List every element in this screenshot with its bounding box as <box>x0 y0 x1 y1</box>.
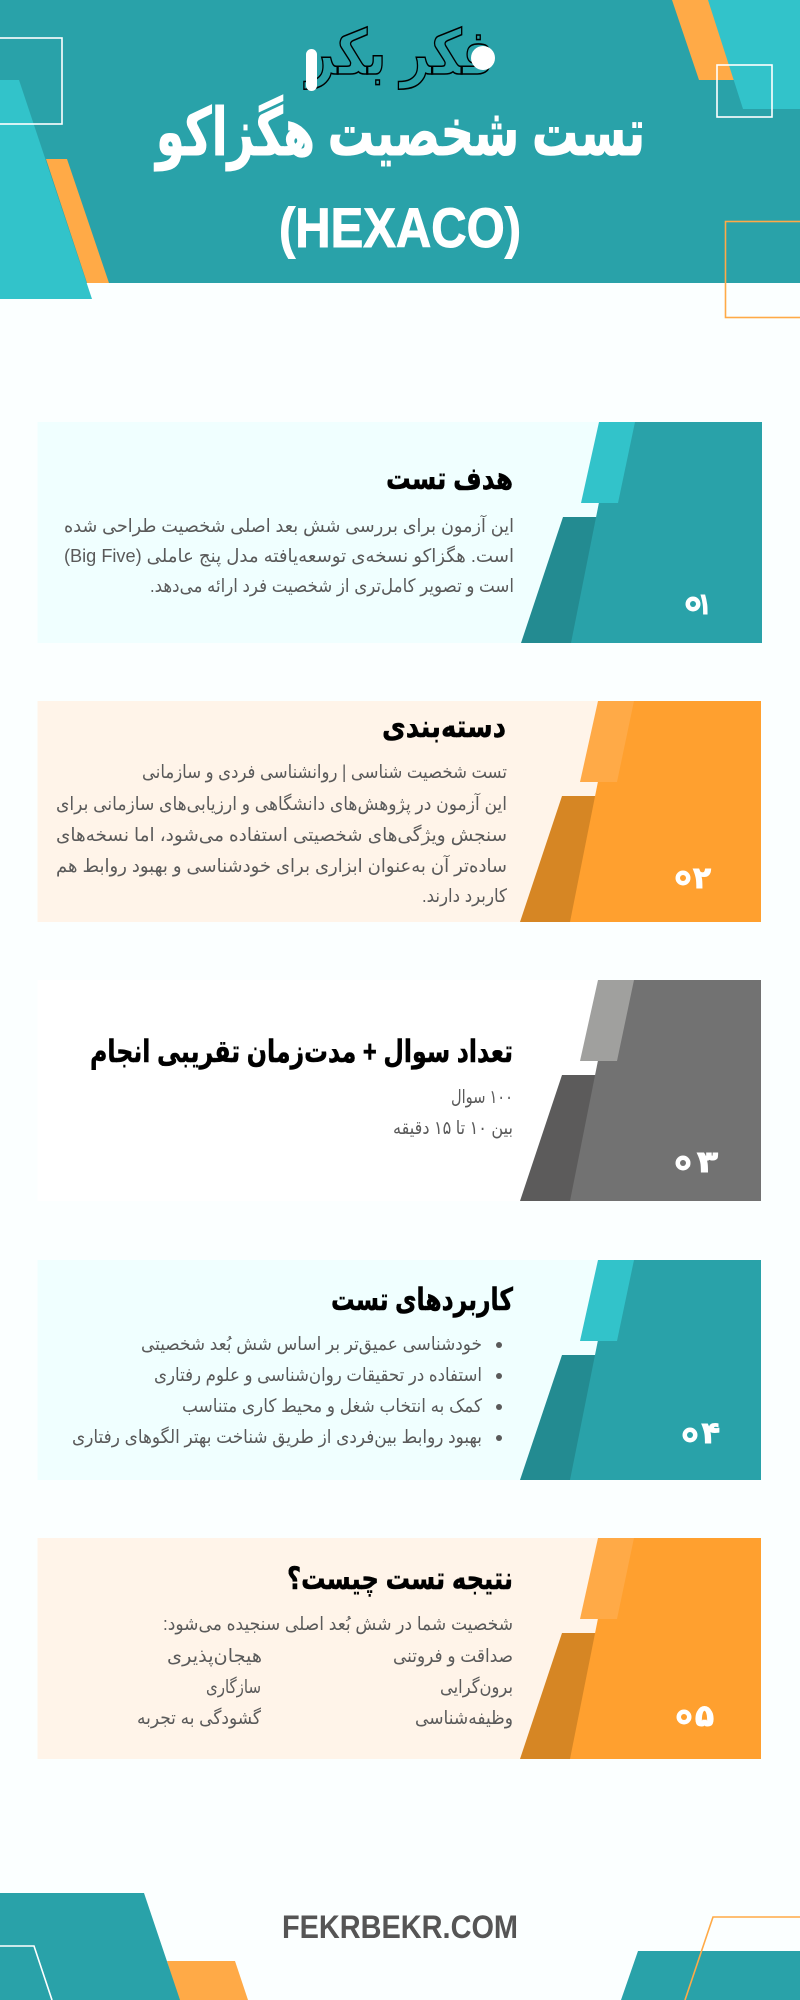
panel 3 decorative block <box>520 980 761 1201</box>
panel 1 decorative block <box>521 422 762 643</box>
panel 4 bullet list: خودشناسی عمیق‌تر بر اساس شش بُعد شخصیتی <box>141 1333 482 1355</box>
header banner <box>0 0 800 318</box>
panel: test goal <box>38 422 762 643</box>
title: (HEXACO) <box>279 196 521 259</box>
panel 5 text: سازگاری <box>206 1676 261 1698</box>
panel 1 text: این آزمون برای بررسی شش بعد اصلی شخصیت طراحی شده <box>64 514 514 537</box>
panel 4 bullet list: کمک به انتخاب شغل و محیط کاری متناسب <box>182 1395 482 1417</box>
panel 5 number: ۰۵ <box>676 1700 714 1733</box>
panel 5 text: گشودگی به تجربه <box>137 1707 261 1729</box>
panel 2 text: تست شخصیت شناسی | روانشناسی فردی و سازمانی <box>142 761 507 783</box>
panel 5 heading: نتیجه تست چیست؟ <box>287 1561 513 1597</box>
panel 1 text <box>64 514 514 597</box>
footer website address: FEKRBEKR.COM <box>282 1909 518 1945</box>
panel 1 text: است. هگزاکو نسخه‌ی توسعه‌یافته مدل پنج عاملی (Big Five) <box>64 545 514 567</box>
panel 5 text: وظیفه‌شناسی <box>415 1707 513 1729</box>
panel 2 text <box>56 761 507 907</box>
panel 5 text: برون‌گرایی <box>440 1676 513 1698</box>
panel 5 text <box>137 1613 513 1729</box>
panel 5 text: هیجان‌پذیری <box>167 1645 262 1667</box>
panel 5 text: صداقت و فروتنی <box>393 1645 513 1667</box>
footer shapes right <box>621 1917 800 2000</box>
panel 4 bullet list: بهبود روابط بین‌فردی از طریق شناخت بهتر الگوهای رفتاری <box>72 1426 482 1448</box>
panel 4 bullet list: استفاده در تحقیقات روان‌شناسی و علوم رفتاری <box>154 1364 482 1386</box>
panel 1 number: ۰۱ <box>685 588 711 621</box>
panel 4 heading: کاربردهای تست <box>331 1282 514 1318</box>
panel 5 text: شخصیت شما در شش بُعد اصلی سنجیده می‌شود: <box>163 1613 513 1635</box>
panel 2 heading: دسته‌بندی <box>382 709 506 744</box>
panel: question count and duration <box>38 980 761 1201</box>
footer shapes left <box>0 1893 248 2000</box>
panel 1 heading: هدف تست <box>386 461 513 496</box>
title <box>154 94 645 259</box>
panel 2 number: ۰۲ <box>675 862 711 895</box>
panel 2 text: کاربرد دارند. <box>422 885 507 907</box>
panel: category <box>38 701 761 922</box>
panel 1 text: است و تصویر کامل‌تری از شخصیت فرد ارائه می‌دهد. <box>150 575 514 597</box>
panel 4 number: ۰۴ <box>683 1417 720 1450</box>
panel 2 text: سنجش ویژگی‌های شخصیتی استفاده می‌شود، اما نسخه‌های <box>56 824 507 846</box>
panel 3 text <box>393 1086 513 1139</box>
panel 2 decorative block <box>520 701 761 922</box>
panel 4 bullet list <box>72 1333 502 1448</box>
logo: fekrbekr: فکر بکر <box>304 19 495 89</box>
panel 3 text: بین ۱۰ تا ۱۵ دقیقه <box>393 1117 513 1139</box>
panel 2 text: ساده‌تر آن به‌عنوان ابزاری برای خودشناسی و بهبود روابط هم <box>56 854 507 877</box>
panel 4 decorative block <box>520 1260 761 1480</box>
panel: test applications <box>38 1260 761 1480</box>
panel 2 text: این آزمون در پژوهش‌های دانشگاهی و ارزیابی‌های سازمانی برای <box>56 792 507 815</box>
panel 3 number: ۰۳ <box>676 1146 718 1179</box>
panel 5 decorative block <box>520 1538 761 1759</box>
panel 3 heading: تعداد سوال + مدت‌زمان تقریبی انجام <box>90 1034 513 1070</box>
panel: test result <box>38 1538 761 1759</box>
panel 3 text: ۱۰۰ سوال <box>451 1086 513 1108</box>
